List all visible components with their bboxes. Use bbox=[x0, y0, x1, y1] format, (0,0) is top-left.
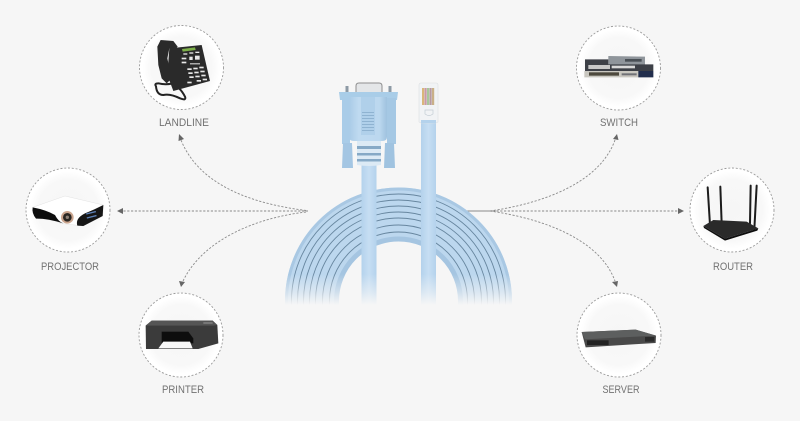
projector device bbox=[26, 168, 110, 252]
DB9 connector bbox=[339, 83, 398, 168]
cable strap: DB9 side bbox=[362, 160, 376, 305]
icon: router bbox=[703, 186, 758, 241]
arrow: to router bbox=[466, 208, 684, 214]
switch device bbox=[576, 26, 660, 110]
icon: projector bbox=[32, 196, 103, 226]
icon: network switch bbox=[584, 56, 653, 77]
arrow: to printer bbox=[179, 212, 306, 287]
label: projector: PROJECTOR bbox=[41, 261, 99, 273]
label: router: ROUTER bbox=[713, 261, 753, 273]
cable fade bbox=[270, 274, 530, 305]
server device bbox=[577, 293, 661, 377]
landline device bbox=[140, 26, 224, 110]
cable strap: RJ45 side bbox=[421, 120, 436, 305]
arrow: to projector bbox=[117, 208, 308, 214]
router device bbox=[690, 168, 774, 252]
printer device bbox=[139, 293, 223, 377]
icon: phone bbox=[155, 40, 210, 99]
label: switch: SWITCH bbox=[600, 117, 638, 129]
label: printer: PRINTER bbox=[162, 384, 204, 396]
arrow: to switch bbox=[490, 134, 618, 211]
label: landline: LANDLINE bbox=[159, 117, 209, 129]
arrow: to server bbox=[490, 211, 618, 287]
icon: server bbox=[582, 330, 656, 347]
arrow: to landline bbox=[178, 134, 306, 210]
RJ45 connector bbox=[419, 83, 438, 123]
cable coil bbox=[285, 188, 512, 304]
icon: printer bbox=[146, 321, 218, 349]
label: server: SERVER bbox=[602, 384, 640, 396]
